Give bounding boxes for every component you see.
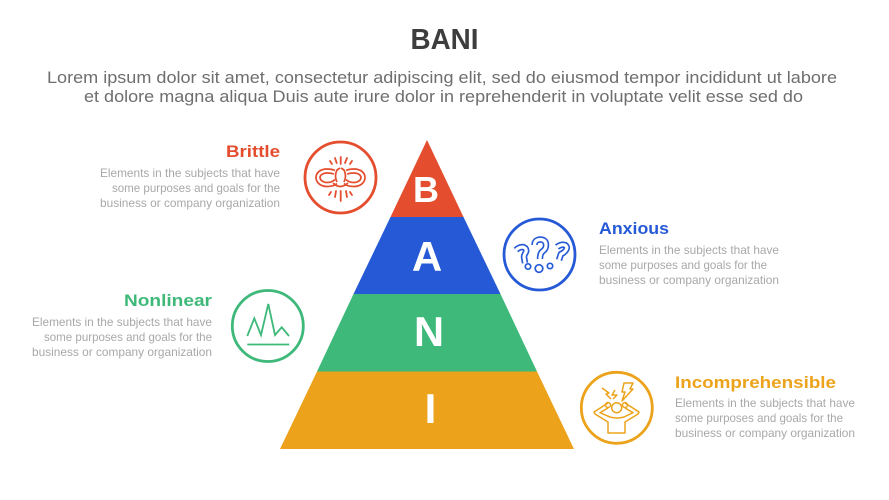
text block: Brittle: Elements in the subjects that have bbox=[100, 166, 280, 180]
text block: Anxious: Elements in the subjects that have bbox=[599, 243, 779, 257]
text block: Anxious: business or company organization bbox=[599, 273, 779, 287]
text block: Nonlinear: some purposes and goals for the bbox=[44, 330, 212, 344]
text block: Incomprehensible: business or company organization bbox=[675, 426, 855, 440]
icon: question marks bbox=[504, 219, 575, 290]
pyramid layer: A bbox=[354, 217, 500, 294]
text block: Nonlinear bbox=[32, 315, 212, 359]
pyramid layer: N bbox=[317, 294, 537, 372]
text block: Anxious: some purposes and goals for the bbox=[599, 258, 767, 272]
pyramid layer: B: B bbox=[413, 169, 439, 210]
pyramid layer: I: I bbox=[425, 385, 436, 432]
text block: Brittle: some purposes and goals for the bbox=[112, 181, 280, 195]
heading: Anxious: Anxious bbox=[599, 220, 669, 238]
heading: Brittle: Brittle bbox=[226, 143, 280, 161]
pyramid layer: N: N bbox=[414, 308, 444, 355]
subtitle: et dolore magna aliqua Duis aute irure dolor in reprehenderit in voluptate velit esse sed do bbox=[84, 87, 803, 106]
text block: Incomprehensible: some purposes and goals for the bbox=[675, 411, 843, 425]
pyramid layer: A: A bbox=[412, 233, 442, 280]
pyramid layer: I bbox=[280, 372, 574, 449]
panel: Incomprehensible bbox=[581, 372, 855, 443]
text block: Brittle: business or company organization bbox=[100, 196, 280, 210]
icon: stressed person bbox=[581, 372, 652, 443]
pyramid layer: B bbox=[390, 140, 464, 217]
heading: Nonlinear: Nonlinear bbox=[124, 292, 213, 310]
pyramid bbox=[280, 140, 574, 449]
panel: Anxious bbox=[504, 219, 779, 290]
panel: Nonlinear bbox=[32, 290, 303, 362]
text block: Brittle bbox=[100, 166, 280, 210]
icon: broken chain bbox=[305, 142, 376, 213]
text block: Anxious bbox=[599, 243, 779, 287]
icon: line chart bbox=[232, 290, 303, 362]
text block: Incomprehensible bbox=[675, 396, 855, 440]
text block: Nonlinear: business or company organization bbox=[32, 345, 212, 359]
title: BANI bbox=[410, 24, 478, 56]
text block: Incomprehensible: Elements in the subjects that have bbox=[675, 396, 855, 410]
panel: Brittle bbox=[100, 142, 376, 213]
text block: Nonlinear: Elements in the subjects that have bbox=[32, 315, 212, 329]
heading: Incomprehensible: Incomprehensible bbox=[675, 374, 836, 392]
subtitle: Lorem ipsum dolor sit amet, consectetur adipiscing elit, sed do eiusmod tempor incididunt ut labore bbox=[47, 68, 837, 87]
subtitle bbox=[47, 68, 837, 106]
